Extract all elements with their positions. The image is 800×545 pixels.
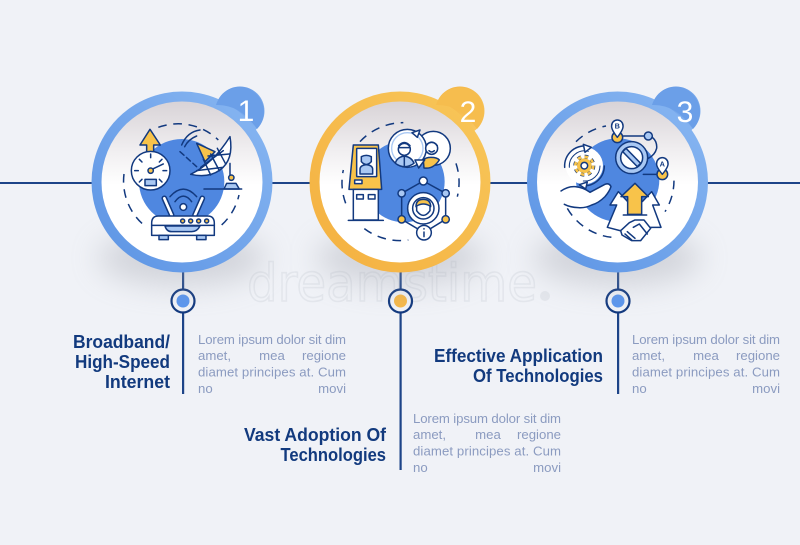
icon: route pins and blocked sign <box>612 120 668 180</box>
body text 2: amet, <box>413 427 446 442</box>
body text 2: regione <box>517 427 561 442</box>
timeline line <box>0 182 800 184</box>
body text 1: Lorem ipsum dolor sit dim <box>198 332 346 347</box>
body text 1: regione <box>302 348 346 363</box>
body text 3: diamet principes at. Cum <box>632 364 780 380</box>
circle shadow 3 <box>533 230 701 286</box>
body text 1: amet, <box>198 348 231 363</box>
badge top 1 <box>216 87 264 129</box>
badge 2 <box>436 86 484 136</box>
badge 1 <box>216 86 264 136</box>
ring 1 <box>92 92 272 272</box>
icon: route pins and blocked sign: A <box>660 159 666 168</box>
body text 2 <box>413 411 561 475</box>
heading 2 <box>244 425 387 465</box>
heading 3: Of Technologies <box>473 366 603 386</box>
icon: satellite dish <box>180 130 242 189</box>
icon: people exchange <box>388 129 450 168</box>
ring 2 <box>310 92 490 272</box>
body text 3 <box>632 332 780 396</box>
heading 2: Vast Adoption Of <box>244 425 387 445</box>
heading 1: Internet <box>105 372 170 392</box>
badge top 3: 3 <box>677 96 693 129</box>
icon: kiosk <box>348 145 383 220</box>
body text 1: movi <box>318 381 346 396</box>
panel: adoption <box>244 86 561 475</box>
ring 3 <box>527 92 708 272</box>
circle shadow 1 <box>98 230 266 286</box>
body text 3: Lorem ipsum dolor sit dim <box>632 332 780 347</box>
heading 3 <box>434 346 603 386</box>
body text 2: diamet principes at. Cum <box>413 444 561 458</box>
icon: internet devices <box>124 124 242 240</box>
watermark: dreamstime <box>247 254 537 314</box>
body text 3: no <box>632 381 647 396</box>
badge top 2 <box>436 87 484 129</box>
icon: gear in cycle with hand <box>561 144 611 208</box>
body text 3: mea <box>693 348 719 363</box>
badge 3 <box>652 86 700 136</box>
icon: user network <box>398 177 449 240</box>
body text 2: no <box>413 460 428 475</box>
icon: technology adoption <box>342 123 459 241</box>
body text 2: Lorem ipsum dolor sit dim <box>413 411 561 426</box>
connector 3 <box>606 270 630 394</box>
body text 1: mea <box>259 348 285 363</box>
panel: broadband <box>73 86 346 396</box>
icon: route pins and blocked sign: B <box>615 122 620 131</box>
heading 3: Effective Application <box>434 346 603 366</box>
body text 3: movi <box>752 381 780 396</box>
heading 1: High-Speed <box>75 352 170 372</box>
circle shadow 2 <box>316 230 484 286</box>
body text 2: mea <box>475 427 501 442</box>
body text 1: diamet principes at. Cum <box>198 364 346 380</box>
badge top 3 <box>652 87 700 129</box>
icon: arrows and handshake <box>607 183 661 241</box>
body text 1: no <box>198 381 213 396</box>
badge top 2: 2 <box>460 96 476 129</box>
body text 2: movi <box>533 460 561 475</box>
body text 3: amet, <box>632 348 665 363</box>
connector 1 <box>172 270 194 394</box>
heading 1: Broadband/ <box>73 332 170 352</box>
heading 1 <box>73 332 170 392</box>
icon: effective application <box>561 120 674 241</box>
icon: speed gauge with arrow <box>131 129 170 190</box>
heading 2: Technologies <box>280 445 386 465</box>
panel: application <box>434 86 780 396</box>
connector 2 <box>389 270 412 470</box>
badge top 1: 1 <box>238 95 254 128</box>
body text 3: regione <box>736 348 780 363</box>
body text 1 <box>198 332 346 396</box>
icon: wifi router <box>152 189 214 240</box>
